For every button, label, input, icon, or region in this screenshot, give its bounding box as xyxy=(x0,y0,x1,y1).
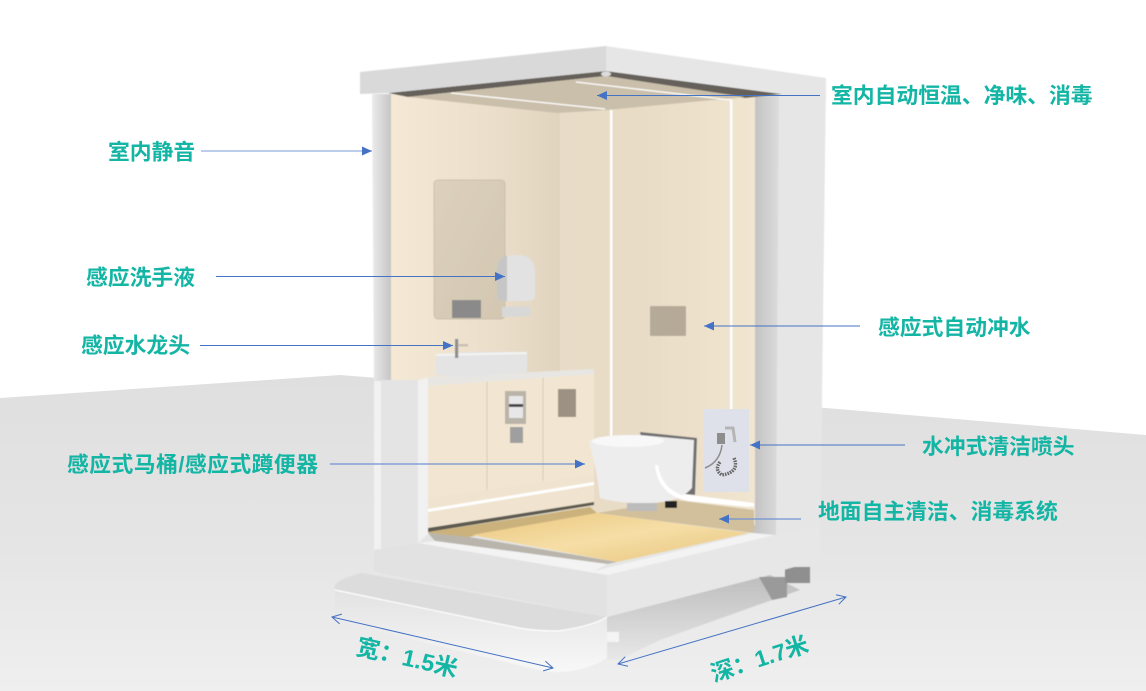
ceiling trim xyxy=(388,71,782,98)
floor band left xyxy=(428,507,597,540)
dimension label: depth: 深：1.7米 xyxy=(708,631,812,687)
countertop xyxy=(428,369,594,386)
floor metal trim xyxy=(428,533,617,564)
toilet xyxy=(589,432,749,511)
back wall xyxy=(560,95,755,525)
ceiling light strips xyxy=(451,82,731,109)
right front wall sill xyxy=(607,526,820,617)
mirror gray panel xyxy=(452,300,481,318)
floor xyxy=(472,513,749,562)
cabinet sensor xyxy=(510,427,523,443)
right outer wall xyxy=(776,78,826,572)
roof left face xyxy=(360,46,606,94)
left front sill xyxy=(374,543,607,617)
cabinet door lines xyxy=(487,377,543,490)
background floor xyxy=(0,375,1146,691)
flush sensor panel xyxy=(650,306,686,336)
right jamb xyxy=(754,95,779,538)
lower skirting xyxy=(428,475,594,528)
callout: 室内静音: 室内静音 xyxy=(108,140,195,164)
left outer wall xyxy=(372,94,391,385)
dimension arrow: depth xyxy=(618,597,846,664)
left interior wall xyxy=(391,94,560,385)
floor drain line xyxy=(428,502,594,532)
roof right face xyxy=(606,46,826,102)
callout: 感应水龙头: 感应水龙头 xyxy=(81,333,190,358)
left front pillar xyxy=(374,378,428,575)
ceiling xyxy=(408,76,745,113)
soap dispenser xyxy=(497,255,535,317)
callout: 室内自动恒温、净味、消毒: 室内自动恒温、净味、消毒 xyxy=(831,83,1093,108)
dimension label: width: 宽：1.5米 xyxy=(354,634,460,682)
callout: 感应洗手液: 感应洗手液 xyxy=(86,265,195,290)
under-floor shadow xyxy=(607,575,800,660)
castor wheels xyxy=(759,567,810,600)
callout: 感应式自动冲水: 感应式自动冲水 xyxy=(878,315,1031,340)
mirror xyxy=(434,180,505,319)
shower image xyxy=(704,409,749,492)
callout: 水冲式清洁喷头: 水冲式清洁喷头 xyxy=(922,434,1075,459)
wall light strips xyxy=(610,100,732,498)
cabinet xyxy=(428,372,594,498)
metal highlight xyxy=(601,72,611,76)
basin xyxy=(436,352,527,377)
step xyxy=(335,573,619,672)
cabinet gray panel xyxy=(558,389,576,417)
dimension arrow: width xyxy=(332,617,553,668)
callout: 地面自主清洁、消毒系统: 地面自主清洁、消毒系统 xyxy=(818,499,1058,524)
faucet xyxy=(455,339,468,358)
callout: 感应式马桶/感应式蹲便器: 感应式马桶/感应式蹲便器 xyxy=(67,452,318,477)
toilet cabin xyxy=(335,46,826,672)
paper holder xyxy=(505,391,526,424)
floor skirting right xyxy=(597,500,754,533)
